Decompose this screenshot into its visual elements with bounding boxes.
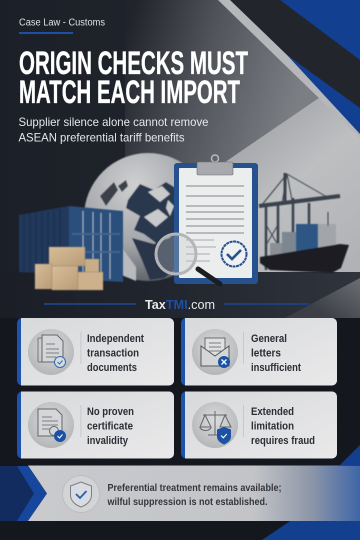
card text: letters [251, 348, 281, 360]
card: independent transaction documents [17, 318, 174, 386]
illustration: globe [84, 153, 212, 281]
card text: General [251, 333, 287, 345]
illustration: cardboard boxes [35, 247, 103, 290]
card text: certificate [87, 420, 133, 432]
card text: invalidity [87, 435, 129, 447]
card text: Extended [251, 406, 294, 418]
divider [242, 405, 245, 437]
card text [87, 333, 144, 374]
subtitle: ASEAN preferential tariff benefits [18, 130, 184, 144]
check seal [222, 242, 246, 266]
card: extended limitation requires fraud [181, 392, 337, 458]
icon: certificate with check [28, 402, 74, 448]
eyebrow label: Case Law - Customs [19, 18, 105, 28]
icon: envelope with cross [192, 329, 238, 375]
card text: documents [87, 362, 137, 374]
divider [80, 332, 82, 364]
icon: document with check [28, 329, 74, 375]
illustration: cargo ship [260, 212, 349, 273]
card text [251, 333, 301, 374]
illustration: port crane [259, 173, 340, 270]
card text: No proven [87, 406, 134, 418]
icon: shield badge [62, 476, 100, 512]
card text: transaction [87, 348, 139, 360]
illustration: clipboard with document [174, 155, 258, 284]
divider [80, 405, 82, 437]
card: general letters insufficient [181, 318, 337, 386]
title [19, 45, 248, 110]
footer message [107, 482, 281, 508]
footer message: Preferential treatment remains available; [108, 482, 282, 494]
subtitle [18, 115, 209, 144]
title: MATCH EACH IMPORT [19, 74, 240, 110]
icon: scales with shield [192, 402, 238, 448]
card text: Independent [87, 333, 144, 345]
card text [251, 406, 315, 447]
footer banner [0, 466, 360, 521]
subtitle: Supplier silence alone cannot remove [18, 115, 209, 129]
card text: insufficient [251, 362, 301, 374]
illustration: magnifying glass [156, 234, 220, 284]
card text [87, 406, 134, 447]
card text: limitation [251, 420, 294, 432]
divider [242, 332, 245, 364]
footer message: wilful suppression is not established. [107, 496, 268, 508]
brand row: TaxTMI.com [145, 297, 215, 312]
illustration: shipping container [19, 206, 123, 282]
card text: requires fraud [251, 435, 315, 447]
card: no proven certificate invalidity [17, 392, 174, 458]
accent rule [19, 32, 73, 34]
clipboard clip [197, 155, 233, 175]
